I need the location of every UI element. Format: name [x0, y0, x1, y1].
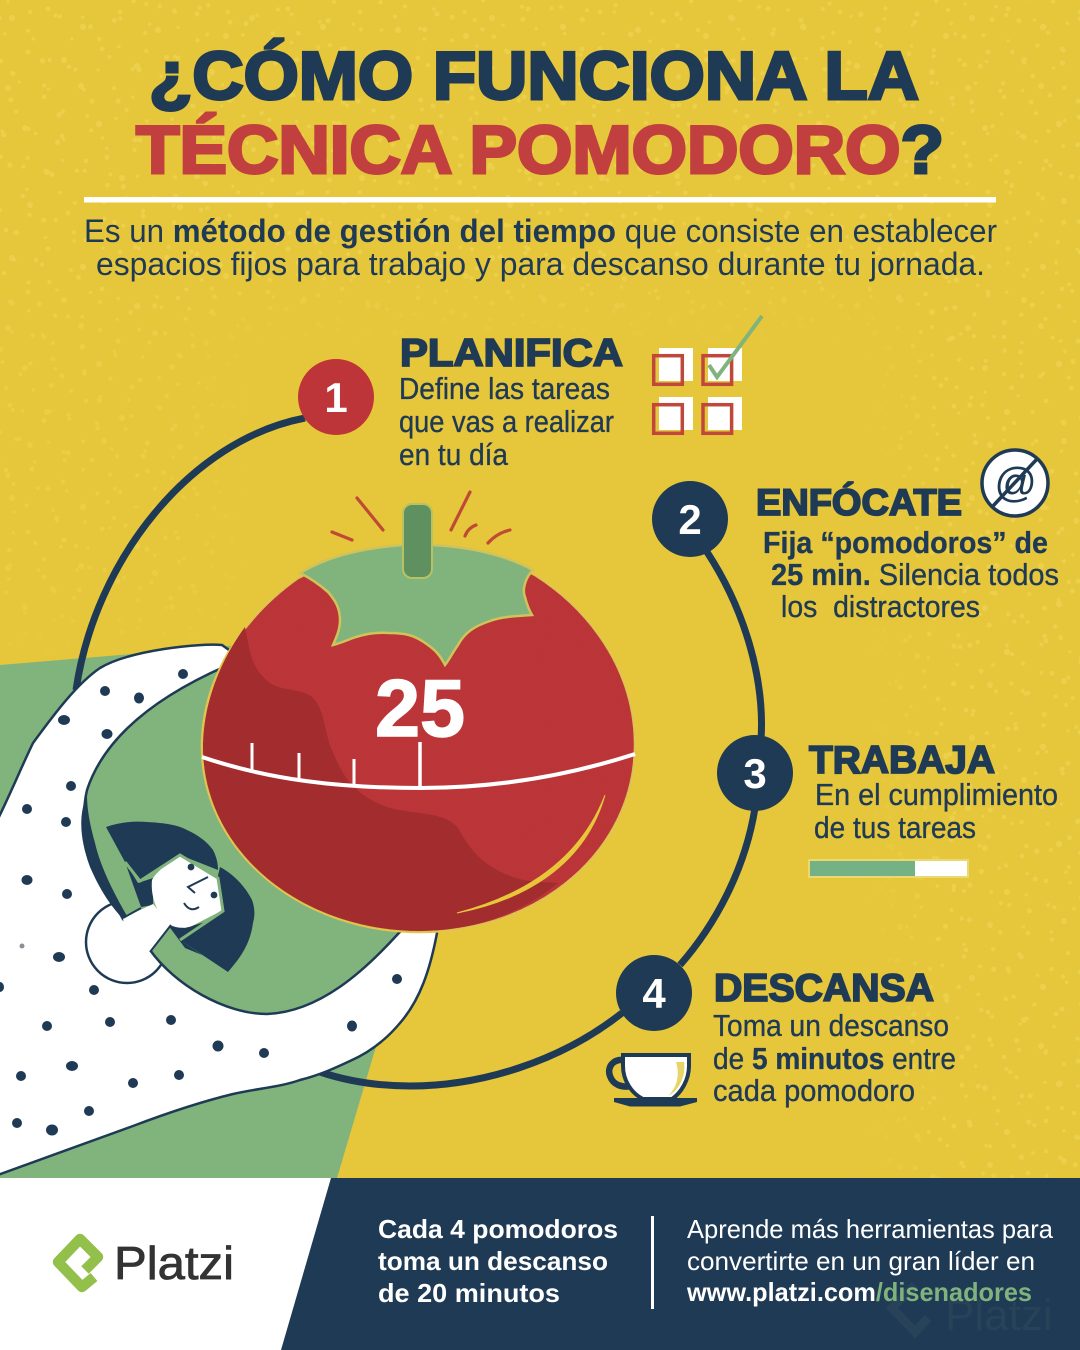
step 2 badge: 2 — [678, 496, 702, 543]
step 2 text: 25 min. Silencia todos — [771, 557, 1059, 592]
break note — [378, 1214, 618, 1308]
faint logo watermark: Platzi — [945, 1291, 1053, 1340]
tomato body — [202, 560, 635, 932]
step 4 text: cada pomodoro — [713, 1073, 915, 1108]
arm — [123, 904, 171, 952]
hair top — [106, 822, 218, 880]
call to action: www.platzi.com/disenadores — [686, 1277, 1032, 1307]
step 4 text: Toma un descanso — [713, 1008, 949, 1043]
hair right — [180, 867, 254, 972]
step 4 text — [713, 967, 956, 1108]
hair back — [125, 862, 153, 907]
step 3 text: de tus tareas — [814, 810, 976, 845]
icon: no email: @ — [994, 459, 1036, 506]
icon: coffee cup — [609, 1055, 697, 1106]
call to action — [686, 1214, 1054, 1307]
stem — [403, 504, 432, 578]
step 3 text — [809, 739, 1058, 845]
dots — [0, 669, 402, 1136]
timer number: 25 — [375, 664, 465, 754]
timer scale — [202, 742, 635, 788]
leaf — [300, 545, 533, 665]
step 1 text: que vas a realizar — [399, 404, 614, 439]
call to action: Aprende más herramientas para — [687, 1214, 1054, 1244]
step 3 badge — [717, 735, 793, 811]
person illustration — [0, 645, 450, 1176]
step 3 text: En el cumplimiento — [815, 777, 1058, 812]
body with polka dots — [0, 645, 437, 1176]
call to action: convertirte en un gran líder en — [687, 1246, 1035, 1276]
icon: checklist — [654, 316, 762, 433]
footer white panel — [0, 1178, 400, 1350]
step 4 text: de 5 minutos entre — [713, 1041, 956, 1076]
step 2 text — [756, 481, 1059, 624]
green background shape — [0, 645, 420, 1178]
step 2 text: los distractores — [781, 589, 980, 624]
platzi logo mark — [58, 1239, 98, 1287]
step 1 badge — [298, 359, 374, 435]
platzi wordmark: Platzi — [114, 1237, 234, 1289]
hand — [86, 901, 168, 983]
break note: de 20 minutos — [378, 1278, 560, 1308]
step 1 text: PLANIFICA — [400, 332, 623, 375]
progress ring arcs — [76, 418, 762, 1086]
step 3 badge: 3 — [743, 750, 767, 797]
step 4 badge: 4 — [642, 970, 666, 1017]
scarf shadow — [81, 795, 127, 919]
step 2 badge — [652, 481, 728, 557]
intro text: Es un método de gestión del tiempo que consiste en establecer — [84, 213, 997, 249]
face — [152, 856, 223, 928]
intro text — [84, 213, 997, 282]
title rule — [84, 197, 996, 202]
step 3 text: TRABAJA — [809, 739, 995, 782]
step 1 text — [399, 332, 623, 472]
step 1 text: Define las tareas — [399, 371, 610, 406]
motion rays — [332, 492, 510, 543]
faint logo watermark — [892, 1285, 1053, 1340]
icon: no email — [982, 450, 1048, 516]
title: ¿CÓMO FUNCIONA LA — [149, 38, 919, 114]
footer navy panel — [281, 1178, 1080, 1350]
highlight — [457, 795, 605, 913]
step 1 text: en tu día — [399, 437, 509, 472]
tomato timer — [200, 492, 640, 935]
facial features — [184, 865, 216, 909]
step 2 text: ENFÓCATE — [756, 481, 962, 523]
footer divider — [651, 1216, 654, 1309]
step 1 badge: 1 — [324, 374, 348, 421]
intro text: espacios fijos para trabajo y para descanso durante tu jornada. — [96, 246, 985, 282]
green scarf — [84, 666, 450, 1014]
step 4 text: DESCANSA — [714, 967, 934, 1010]
footer — [0, 1178, 1080, 1350]
step 2 text: Fija “pomodoros” de — [763, 525, 1048, 560]
title: TÉCNICA POMODORO ? — [136, 112, 944, 188]
break note: toma un descanso — [378, 1246, 608, 1276]
break note: Cada 4 pomodoros — [378, 1214, 618, 1244]
tomato grain — [200, 560, 640, 935]
progress bar — [808, 859, 969, 878]
face edge — [125, 855, 223, 940]
tomato shadow — [203, 627, 558, 931]
step 4 badge — [616, 955, 692, 1031]
title — [136, 38, 944, 188]
